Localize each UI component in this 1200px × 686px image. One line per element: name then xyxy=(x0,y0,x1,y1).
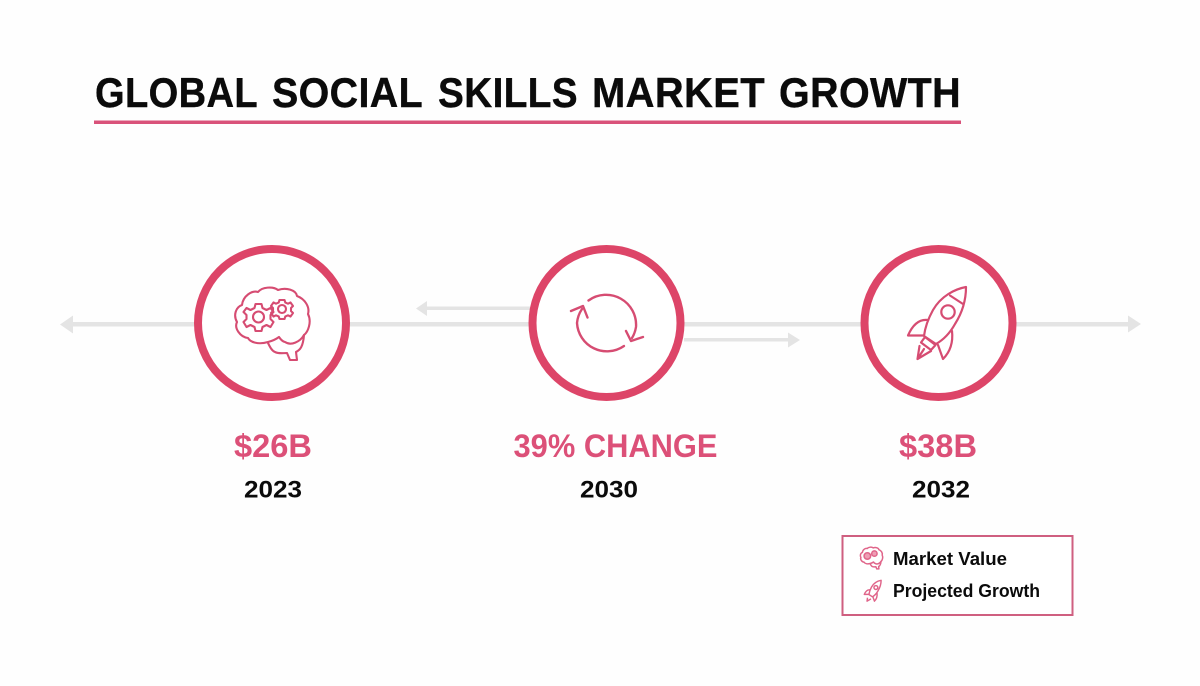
title: GROWTH xyxy=(779,69,961,116)
legend label: market value: Market Value xyxy=(893,549,1007,569)
year: 2023 xyxy=(244,476,302,504)
year: 2032 xyxy=(912,476,970,504)
panel: 2032 projected growth xyxy=(864,249,1012,504)
value: 39% CHANGE xyxy=(514,428,718,464)
legend label: projected growth: Projected Growth xyxy=(893,581,1040,601)
icon: rocket xyxy=(908,287,966,359)
value: $26B xyxy=(234,428,312,464)
title: GLOBAL xyxy=(95,69,258,116)
title xyxy=(94,69,961,124)
icon circle: rocket xyxy=(864,249,1012,397)
icon: cycle arrows xyxy=(571,295,643,351)
arrow: decline pointing left xyxy=(416,301,530,316)
arrow: main timeline xyxy=(60,316,1141,334)
arrow: growth pointing right xyxy=(684,332,800,348)
year: 2030 xyxy=(580,476,638,504)
icon: brain with gears xyxy=(235,288,310,360)
title: MARKET xyxy=(592,69,765,116)
title: SKILLS xyxy=(438,69,578,116)
value: $38B xyxy=(899,428,977,464)
panel: 2030 change xyxy=(514,249,718,504)
legend xyxy=(842,536,1072,615)
icon circle: brain xyxy=(198,249,346,397)
panel: 2023 market value xyxy=(198,249,346,504)
legend icon: brain xyxy=(860,547,883,569)
title: SOCIAL xyxy=(272,69,423,116)
legend icon: rocket xyxy=(864,580,881,601)
icon circle: cycle xyxy=(532,249,680,397)
